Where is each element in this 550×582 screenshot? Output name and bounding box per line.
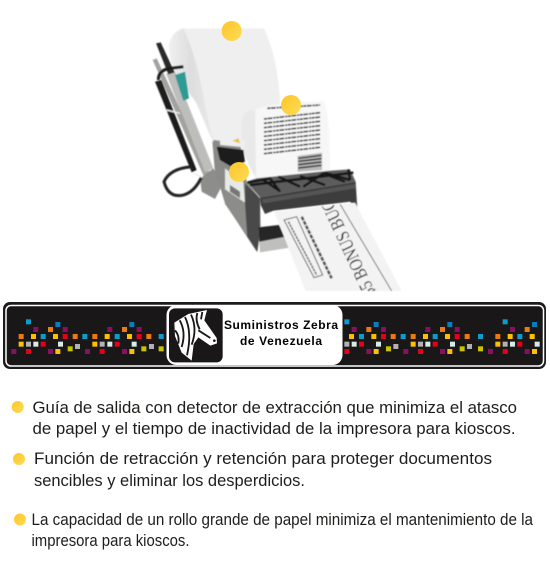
printer body (213, 138, 357, 252)
cable loop (164, 167, 202, 196)
printed receipt (242, 101, 330, 180)
bullet item 3: impresora para kioscos. (32, 531, 190, 550)
right colour squares (344, 319, 540, 354)
icon: zebra head (169, 308, 223, 362)
feature list (12, 398, 533, 550)
side arm and bracket (153, 42, 222, 199)
callout dot: paper roll (222, 21, 242, 41)
printer illustration (153, 21, 402, 300)
bullet item 1: Guía de salida con detector de extracción que minimiza el atasco (32, 398, 517, 417)
callout dot: mechanism (229, 162, 249, 182)
front bar (260, 182, 357, 214)
bullet item 2 (13, 449, 492, 490)
bullet item 2: sencibles y eliminar los desperdicios. (34, 471, 305, 490)
paper roll (169, 28, 280, 143)
left colour squares (11, 319, 164, 354)
callout dot: receipt (281, 95, 301, 115)
mechanism (213, 140, 260, 252)
banner (3, 302, 546, 369)
output paper with coupon: $5 BONUS BUCKS (309, 179, 381, 300)
bullet item 1: de papel y el tiempo de inactividad de la impresora para kioscos. (32, 419, 516, 438)
bullet item 2: Función de retracción y retención para proteger documentos (34, 449, 492, 468)
base block (258, 225, 292, 252)
bullet item 1 (12, 398, 517, 438)
logo text second line: de Venezuela (240, 334, 322, 348)
banner frame (3, 302, 546, 369)
side plate (225, 183, 261, 252)
logo text: Suministros Zebra (224, 318, 338, 332)
logo plate (166, 305, 342, 365)
output paper with coupon (274, 202, 401, 292)
top grid (247, 169, 356, 197)
bullet item 3 (14, 510, 533, 550)
